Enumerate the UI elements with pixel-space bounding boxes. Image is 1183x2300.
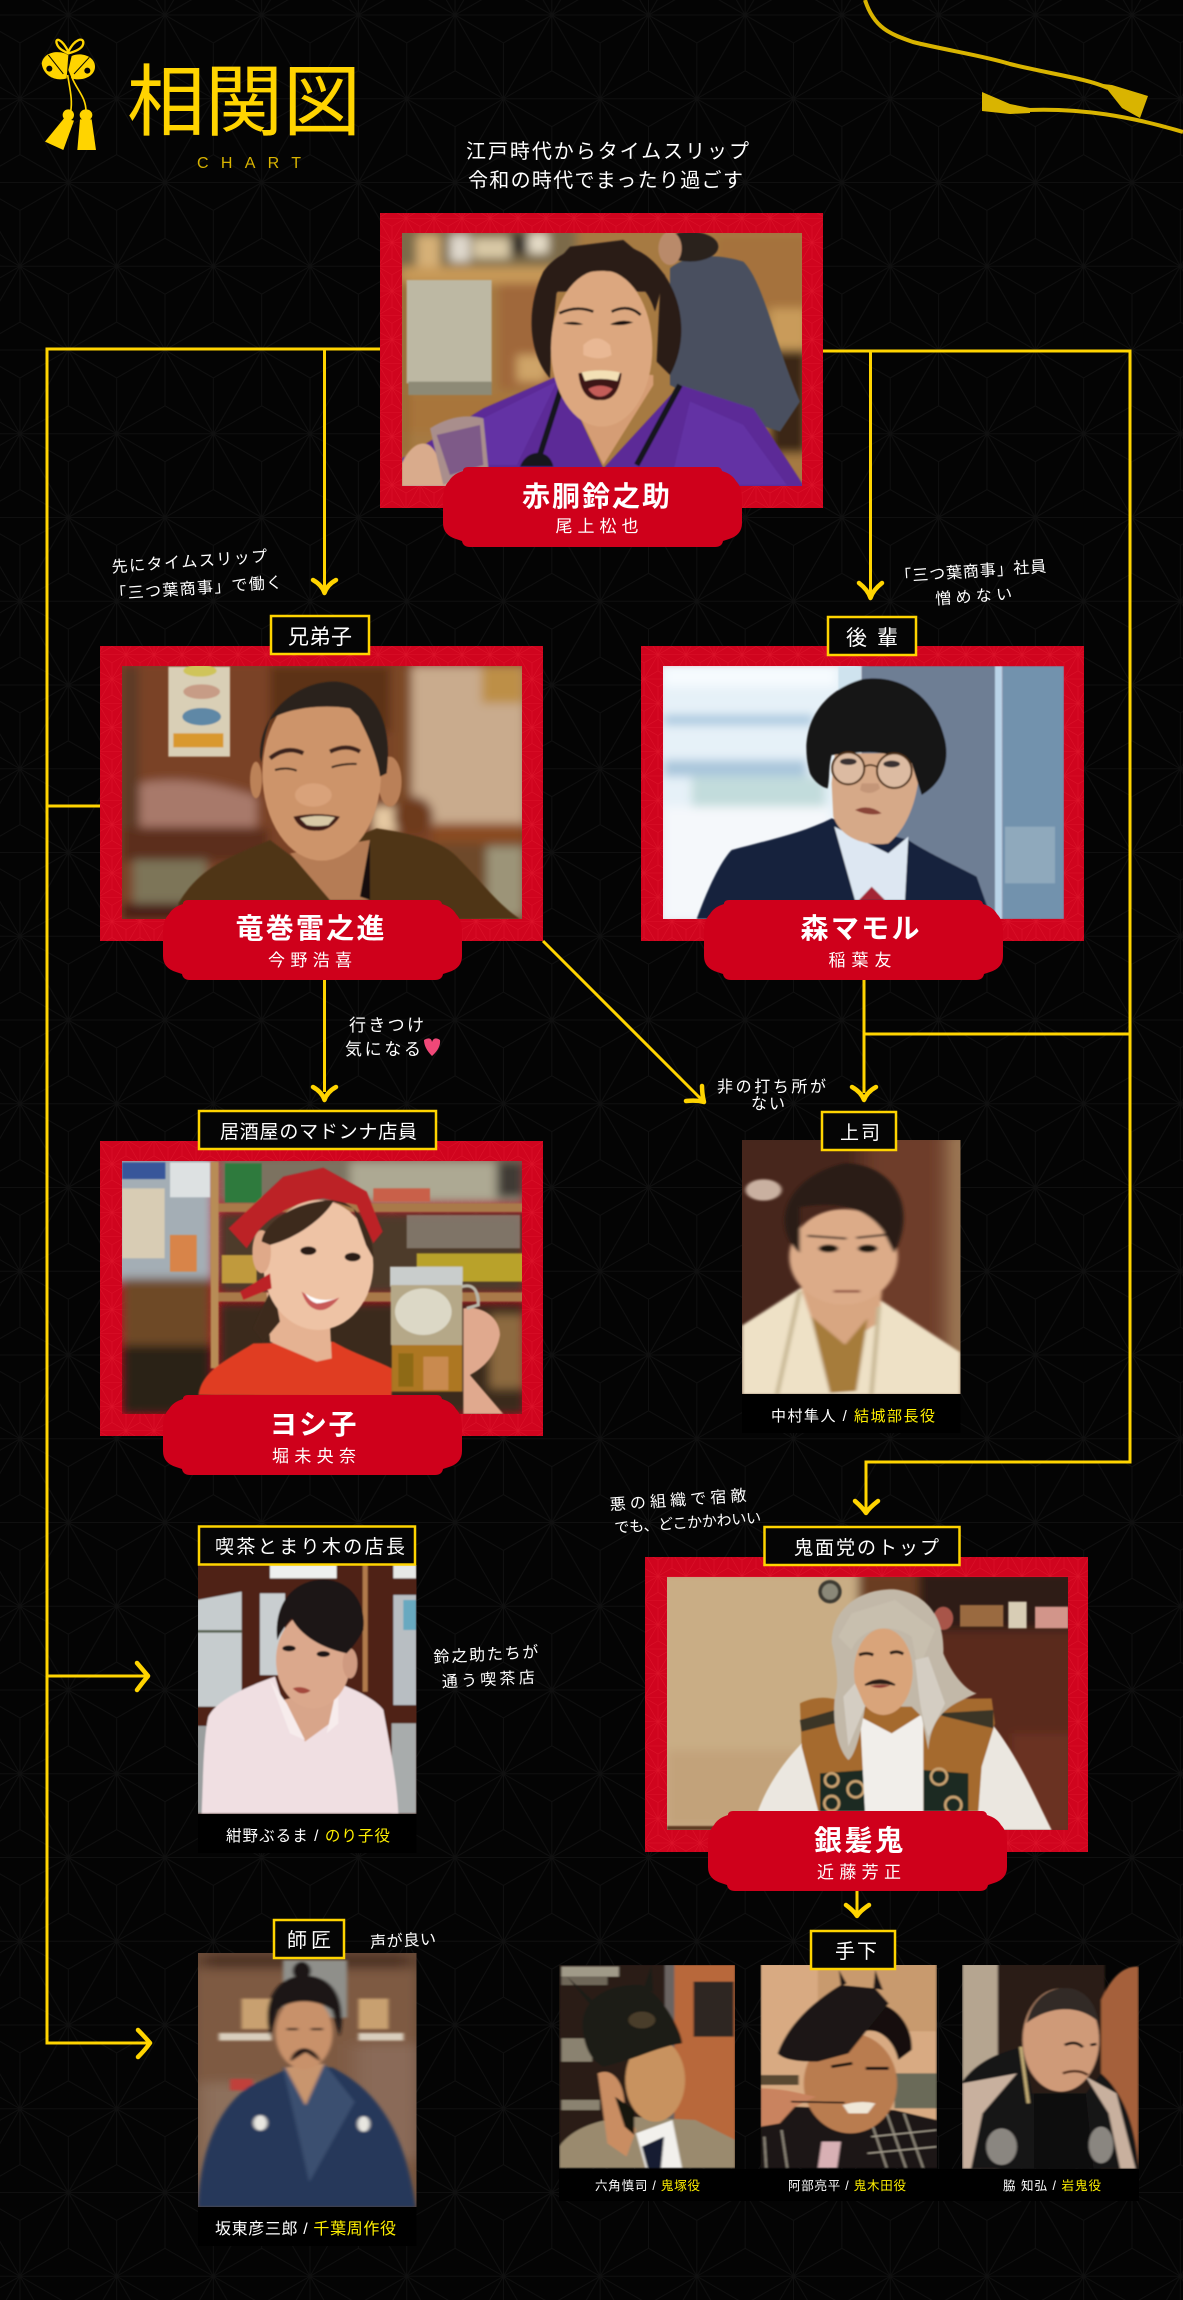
caption: 坂東彦三郎 / 千葉周作役 xyxy=(215,2220,396,2238)
caption backing xyxy=(198,2207,416,2246)
label: 居酒屋のマドンナ店員 xyxy=(199,1111,436,1149)
note: 非の打ち所がない: ない xyxy=(751,1095,785,1113)
note: 江戸時代 xyxy=(466,140,749,192)
photo: 赤胴鈴之助 xyxy=(402,233,802,486)
panel: 師匠 portrait xyxy=(198,1953,416,2246)
label: 師匠 xyxy=(274,1920,344,1958)
label: 居酒屋のマドンナ店員: 居酒屋のマドンナ店員 xyxy=(220,1121,417,1143)
caption backing xyxy=(742,1394,960,1433)
note: 社員: 「三つ葉商事」社員 xyxy=(895,558,1047,586)
caption: 紺野ぶるま / のり子役 xyxy=(226,1827,390,1845)
label: 後輩: 後輩 xyxy=(846,627,898,650)
note: 先にタイムスリップ: 先にタイムスリップ xyxy=(111,548,268,576)
name plate: 尾上松也 xyxy=(556,517,638,536)
photo: ヨシ子 xyxy=(110,1155,525,1415)
icon: pink heart xyxy=(424,1038,440,1056)
name plate: 堀未央奈 xyxy=(272,1447,356,1466)
name plate: 近藤芳正 xyxy=(817,1863,901,1882)
frame xyxy=(100,646,543,941)
note: 悪の組織で宿敵: 悪の組織で宿敵 xyxy=(609,1487,747,1514)
captions: 脇 知弘 / 岩鬼役 xyxy=(1003,2178,1101,2193)
photo: 阿部亮平 xyxy=(760,1964,937,2168)
captions: 六角慎司 / 鬼塚役 xyxy=(595,2178,700,2193)
name plate xyxy=(163,900,462,980)
note: 声が良い: 声が良い xyxy=(370,1930,436,1952)
photo: 紺野ぶるま xyxy=(198,1565,416,1814)
photo: 六角慎司 xyxy=(559,1965,736,2168)
name plate: ヨシ子 xyxy=(270,1409,356,1440)
name plate xyxy=(704,900,1003,980)
photo: 坂東彦三郎 xyxy=(198,1953,416,2207)
name plate: 稲葉友 xyxy=(828,951,892,970)
caption backing xyxy=(198,1814,416,1853)
note: 社員: 憎めない xyxy=(935,585,1013,608)
note: 行きつけ: 気になる xyxy=(345,1040,421,1059)
label: 上司: 上司 xyxy=(840,1122,880,1144)
caption backing xyxy=(559,2169,1139,2201)
panel: 赤胴鈴之助 xyxy=(380,213,823,547)
title: 相関図 xyxy=(127,58,361,146)
label: 鬼面党のトップ xyxy=(764,1527,960,1565)
name plate xyxy=(443,467,742,547)
label: 兄弟子: 兄弟子 xyxy=(288,626,352,649)
arrowheads xyxy=(137,580,882,2057)
frame xyxy=(100,1141,543,1436)
photo: 脇知弘 xyxy=(962,1964,1139,2169)
note: 社員 xyxy=(895,558,1049,611)
icon: bell charm logo xyxy=(42,40,96,150)
label: 師匠: 師匠 xyxy=(287,1929,331,1952)
panel: 上司 portrait xyxy=(742,1140,960,1433)
panel: 喫茶店長 portrait xyxy=(190,1560,423,1853)
panel: 森マモル xyxy=(641,646,1084,980)
note: 非の打ち所がない: 非の打ち所が xyxy=(717,1078,826,1096)
label: 喫茶とまり木の店長 xyxy=(199,1526,415,1564)
decorative tassel cords top right xyxy=(865,0,1183,132)
captions xyxy=(595,2178,1101,2193)
label: 上司 xyxy=(822,1112,896,1150)
name plate: 銀髪鬼 xyxy=(814,1825,903,1856)
name plate: 赤胴鈴之助 xyxy=(522,481,670,512)
name plate xyxy=(708,1811,1007,1891)
note: 悪の組織で宿敵: でも、どこかかわいい xyxy=(614,1510,762,1537)
captions: 阿部亮平 / 鬼木田役 xyxy=(788,2178,906,2193)
frame xyxy=(645,1557,1088,1852)
label: 手下 xyxy=(811,1931,895,1969)
photo: 中村隼人 xyxy=(742,1140,960,1394)
panel: 竜巻雷之進 xyxy=(100,646,543,980)
note: 江戸時代: 江戸時代からタイムスリップ xyxy=(466,140,749,163)
panel: 銀髪鬼 xyxy=(645,1557,1088,1891)
note: 行きつけ: 行きつけ xyxy=(349,1016,424,1035)
subtitle: CHART xyxy=(197,155,301,172)
frame xyxy=(641,646,1084,941)
frame xyxy=(380,213,823,508)
name plate: 竜巻雷之進 xyxy=(236,913,384,944)
note: 非の打ち所がない xyxy=(717,1078,826,1113)
label: 鬼面党のトップ: 鬼面党のトップ xyxy=(794,1537,939,1559)
note: 先にタイムスリップ: 「三つ葉商事」で働く xyxy=(110,574,283,604)
photo: 森マモル xyxy=(655,660,1064,927)
label: 手下: 手下 xyxy=(835,1940,877,1963)
name plate: 今野浩喜 xyxy=(268,951,352,970)
label: 喫茶とまり木の店長: 喫茶とまり木の店長 xyxy=(215,1536,405,1558)
note: 江戸時代: 令和の時代でまったり過ごす xyxy=(468,169,743,192)
note: 鈴之助たちが: 鈴之助たちが xyxy=(433,1643,539,1667)
note: 鈴之助たちが: 通う喫茶店 xyxy=(441,1669,535,1691)
name plate xyxy=(163,1395,462,1475)
panel: ヨシ子 xyxy=(100,1141,543,1475)
caption: 中村隼人 / 結城部長役 xyxy=(771,1408,935,1425)
photo: 竜巻雷之進 xyxy=(122,666,522,919)
note: 先にタイムスリップ xyxy=(108,547,283,604)
note: 鈴之助たちが xyxy=(433,1643,540,1692)
label: 後輩 xyxy=(828,617,916,655)
name plate: 森マモル xyxy=(800,913,920,944)
photo: 銀髪鬼 xyxy=(667,1577,1068,1830)
connector lines xyxy=(47,349,1130,2043)
panel: 手下 minions xyxy=(559,1964,1139,2201)
label: 兄弟子 xyxy=(271,616,369,654)
note: 行きつけ xyxy=(345,1016,440,1059)
note: 悪の組織で宿敵 xyxy=(609,1486,762,1537)
